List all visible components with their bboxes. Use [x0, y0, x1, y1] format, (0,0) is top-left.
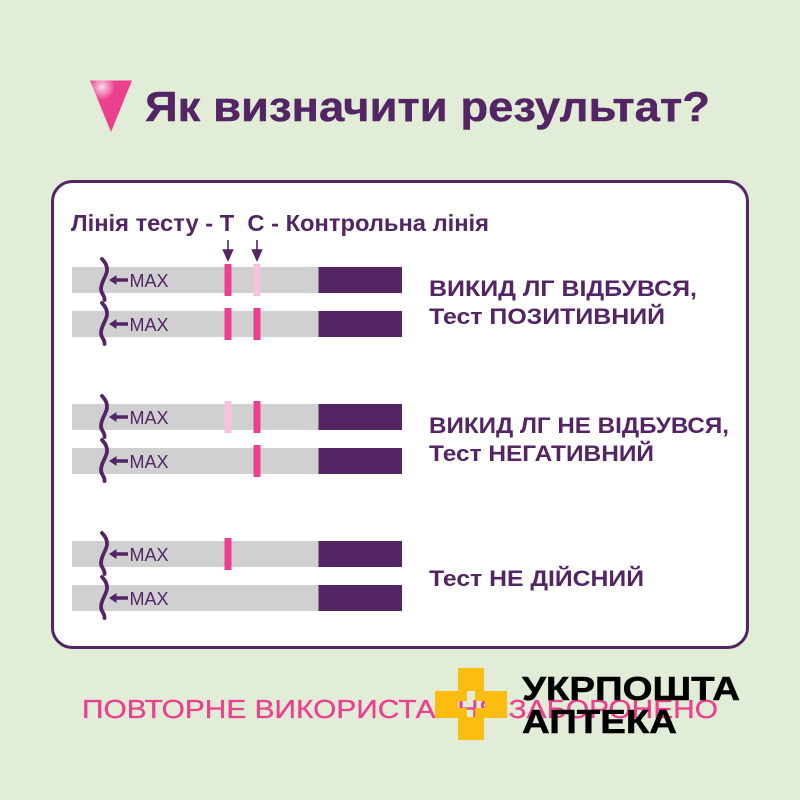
- test strip: positive 2: [72, 303, 402, 344]
- warning text: ПОВТОРНЕ ВИКОРИСТАННЯ ЗАБОРОНЕНО: [82, 694, 718, 724]
- logo: Ukrposhta Apteka: [435, 668, 740, 740]
- test strip: invalid 2: [72, 577, 402, 618]
- result text: positive: ВИКИД ЛГ ВІДБУВСЯ,: [429, 276, 697, 301]
- result text: negative: Тест НЕГАТИВНИЙ: [429, 441, 654, 466]
- logo wordmark: УКРПОШТА: [522, 670, 740, 707]
- test strip: positive 2: MAX: [130, 315, 168, 335]
- test strip: invalid 1: [72, 533, 402, 574]
- panel: results card: [52, 182, 748, 648]
- title: Як визначити результат?: [145, 83, 710, 130]
- icon: yellow cross: [435, 668, 507, 740]
- test strip: negative 2: [72, 440, 402, 481]
- icon: pink triangle: [90, 80, 132, 132]
- test strip: negative 1: MAX: [130, 408, 168, 428]
- test strip: invalid 1: MAX: [130, 545, 168, 565]
- test strip: invalid 2: MAX: [130, 589, 168, 609]
- result text: negative: ВИКИД ЛГ НЕ ВІДБУВСЯ,: [429, 413, 729, 438]
- test strip: positive 1: [72, 259, 402, 300]
- legend: line labels: Лінія тесту - Т С - Контрольна лінія: [71, 210, 489, 236]
- test strip: negative 1: [72, 396, 402, 437]
- test strip: positive 1: MAX: [130, 271, 168, 291]
- legend: line labels: [71, 210, 489, 260]
- result text: positive: Тест ПОЗИТИВНИЙ: [429, 304, 665, 329]
- result text: invalid: Тест НЕ ДІЙСНИЙ: [429, 566, 644, 591]
- logo wordmark: АПТЕКА: [522, 703, 677, 740]
- test strip: negative 2: MAX: [130, 452, 168, 472]
